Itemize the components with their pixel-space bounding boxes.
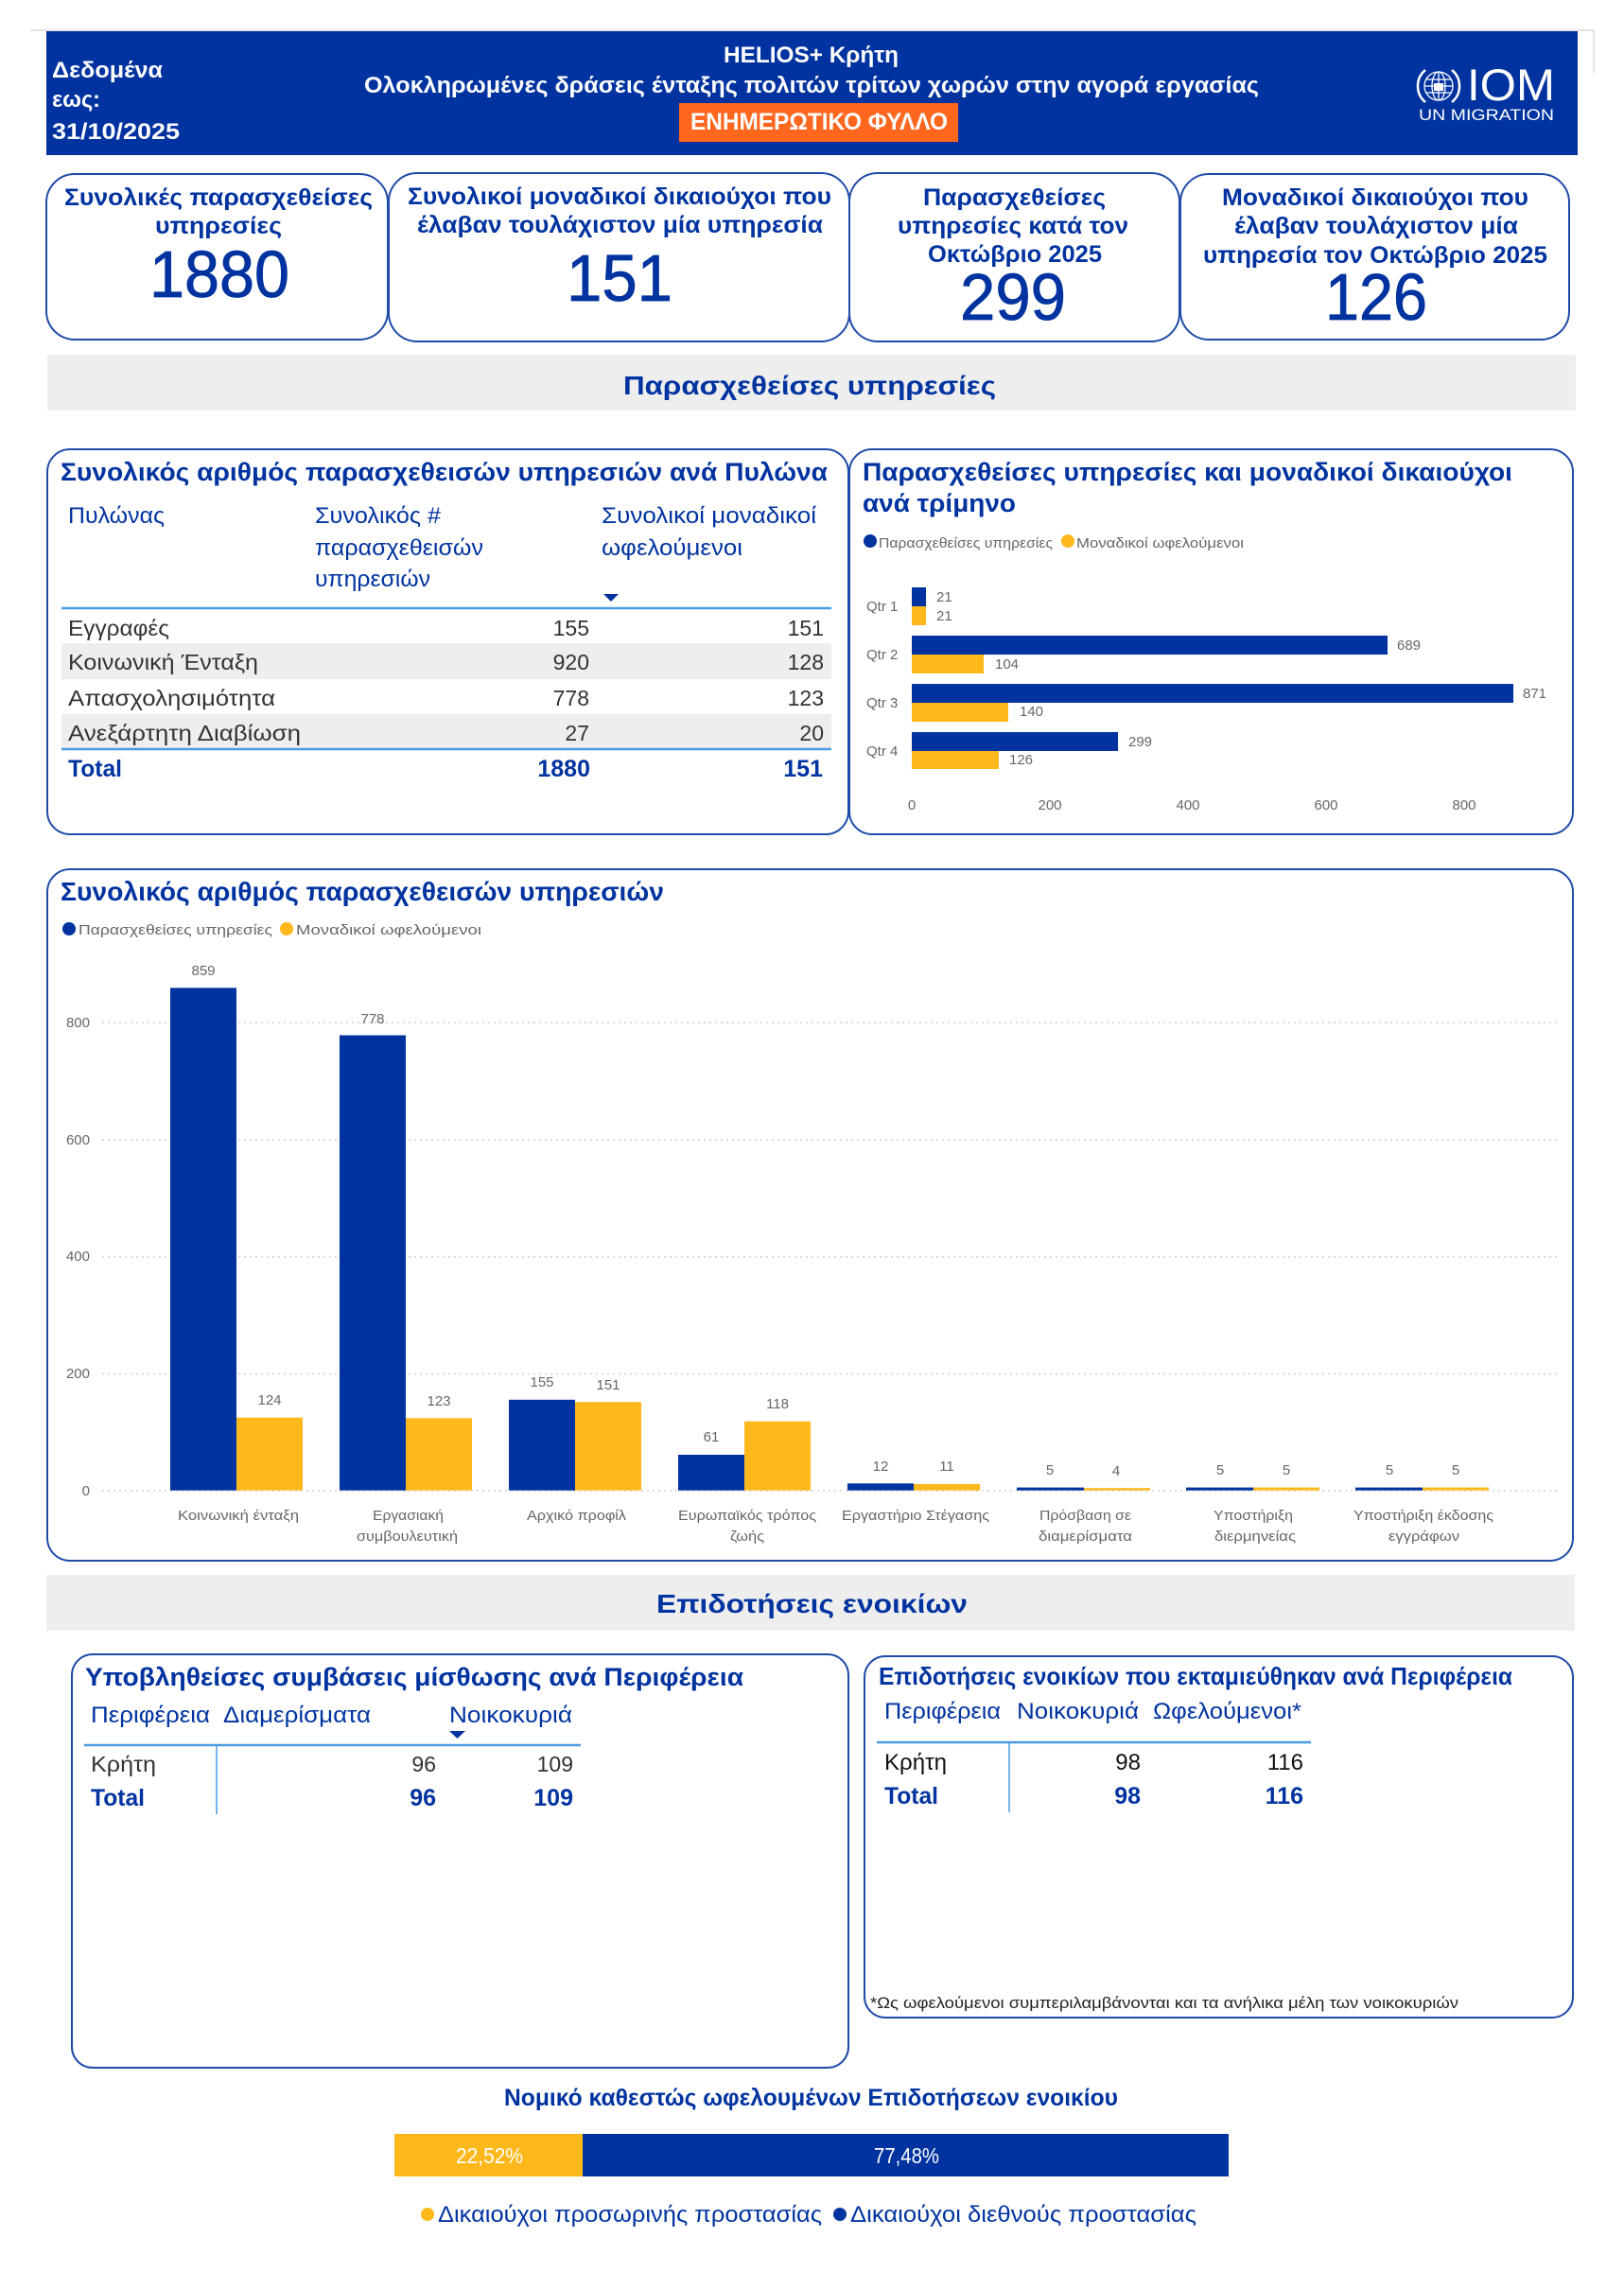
y axis labels: 400 xyxy=(66,1249,90,1265)
table header: Συνολικοί μοναδικοί xyxy=(602,503,817,529)
horizontal bar chart: 140 xyxy=(1020,704,1043,720)
chart legend xyxy=(62,922,481,938)
panel: submitted leases by region xyxy=(72,1654,848,2068)
KPI card: beneficiaries in October xyxy=(1180,174,1569,340)
KPI card: total services xyxy=(46,174,388,340)
table rows: 920 xyxy=(553,650,589,674)
y axis labels: 0 xyxy=(82,1483,90,1499)
horizontal bar chart: 689 xyxy=(1397,638,1421,654)
horizontal bar chart: 21 xyxy=(936,608,952,624)
chart legend: Παρασχεθείσες υπηρεσίες xyxy=(79,922,272,938)
horizontal bar chart: Qtr 2 xyxy=(866,647,898,663)
horizontal bar chart: 400 xyxy=(1176,797,1200,813)
icon: IOM logo xyxy=(1418,60,1555,124)
table rows: Total xyxy=(884,1783,938,1809)
table header: ωφελούμενοι xyxy=(602,535,742,561)
KPI card: services in October: Παρασχεθείσες xyxy=(923,184,1106,211)
table rows xyxy=(68,616,824,745)
footnote: *Ως ωφελούμενοι συμπεριλαμβάνονται και τα ανήλικα μέλη των νοικοκυριών xyxy=(870,1994,1458,2012)
table rows: 109 xyxy=(533,1785,573,1811)
table rows: 96 xyxy=(411,1752,436,1776)
table rows: 27 xyxy=(565,721,589,745)
x axis labels: Υποστήριξη έκδοσης xyxy=(1353,1508,1493,1524)
x axis labels: Αρχικό προφίλ xyxy=(527,1508,627,1524)
table rows: Ανεξάρτητη Διαβίωση xyxy=(68,721,301,745)
KPI card: beneficiaries in October: 126 xyxy=(1325,260,1427,334)
table rows: Κρήτη xyxy=(91,1752,156,1776)
chart title xyxy=(863,458,1512,517)
factsheet badge xyxy=(679,103,958,142)
y axis labels xyxy=(66,1015,90,1499)
KPI card: total beneficiaries: έλαβαν τουλάχιστον μία υπηρεσία xyxy=(417,212,824,238)
header banner xyxy=(46,31,1578,155)
legal status legend xyxy=(421,2202,1196,2228)
KPI card: services in October: 299 xyxy=(960,260,1066,334)
title: HELIOS+ Κρήτη xyxy=(724,43,899,68)
KPI card: total beneficiaries: 151 xyxy=(567,241,672,315)
horizontal bar chart: 104 xyxy=(995,656,1019,673)
section heading: services: Παρασχεθείσες υπηρεσίες xyxy=(623,371,996,400)
table header xyxy=(68,503,817,602)
table rows: 96 xyxy=(410,1785,436,1811)
table header: Περιφέρεια xyxy=(884,1699,1001,1724)
KPI card: services in October: υπηρεσίες κατά τον xyxy=(898,213,1128,239)
KPI card: beneficiaries in October: έλαβαν τουλάχιστον μία xyxy=(1234,213,1519,239)
panel: services by pillar table xyxy=(47,449,848,834)
table rows: Total xyxy=(91,1785,145,1811)
chart legend xyxy=(864,534,1244,551)
table title: Συνολικός αριθμός παρασχεθεισών υπηρεσιών ανά Πυλώνα xyxy=(61,458,828,486)
chart title: ανά τρίμηνο xyxy=(863,489,1016,517)
stacked bar: legal status xyxy=(394,2134,1229,2176)
chart legend: Μοναδικοί ωφελούμενοι xyxy=(1076,535,1244,551)
table title: Υποβληθείσες συμβάσεις μίσθωσης ανά Περιφέρεια xyxy=(85,1663,743,1691)
horizontal bar chart xyxy=(866,587,1546,813)
column chart: 859 xyxy=(191,963,216,979)
panel: subsidies disbursed by region xyxy=(864,1656,1573,2018)
column chart: 11 xyxy=(939,1459,954,1475)
section heading: rent subsidies: Επιδοτήσεις ενοικίων xyxy=(656,1589,968,1618)
section heading: rent subsidies xyxy=(46,1575,1575,1631)
table rows: 123 xyxy=(788,686,824,710)
legal status heading: Νομικό καθεστώς ωφελουμένων Επιδοτήσεων ενοικίου xyxy=(504,2085,1118,2111)
table total: 1880 xyxy=(537,756,590,782)
table title: Επιδοτήσεις ενοικίων που εκταμιεύθηκαν ανά Περιφέρεια xyxy=(879,1662,1512,1690)
table rows xyxy=(884,1750,1303,1809)
data date: Δεδομένα xyxy=(52,58,163,83)
column chart: 151 xyxy=(596,1377,620,1393)
table rows: Κρήτη xyxy=(884,1750,947,1775)
table header: Πυλώνας xyxy=(68,503,165,529)
chart legend: Μοναδικοί ωφελούμενοι xyxy=(296,922,481,938)
table header: υπηρεσιών xyxy=(315,567,430,592)
horizontal bar chart: 21 xyxy=(936,589,952,605)
horizontal bar chart: 871 xyxy=(1523,686,1546,702)
table rows: 20 xyxy=(799,721,824,745)
table rows: 778 xyxy=(553,686,589,710)
table rows: 116 xyxy=(1266,1783,1303,1809)
icon: IOM logo: UN MIGRATION xyxy=(1419,106,1554,124)
KPI card: total services: υπηρεσίες xyxy=(155,213,282,239)
chart title: Συνολικός αριθμός παρασχεθεισών υπηρεσιών xyxy=(61,877,664,906)
table header xyxy=(884,1699,1301,1724)
column chart: 12 xyxy=(873,1459,888,1475)
table header: Ωφελούμενοι* xyxy=(1153,1699,1301,1724)
data date: εως: xyxy=(52,87,100,113)
table header: παρασχεθεισών xyxy=(315,535,483,561)
table header: Νοικοκυριά xyxy=(449,1703,572,1728)
legal status legend: Δικαιούχοι διεθνούς προστασίας xyxy=(850,2202,1196,2228)
table rows: Κοινωνική Ένταξη xyxy=(68,650,258,674)
KPI card: total beneficiaries xyxy=(389,173,849,341)
x axis labels: συμβουλευτική xyxy=(357,1529,458,1545)
column chart: 118 xyxy=(766,1396,789,1412)
y axis labels: 200 xyxy=(66,1366,90,1382)
horizontal bar chart: Qtr 4 xyxy=(866,743,898,760)
x axis labels xyxy=(178,1508,1493,1545)
section heading: services xyxy=(47,355,1576,411)
column chart: 5 xyxy=(1046,1462,1054,1478)
x axis labels: Εργασιακή xyxy=(373,1508,444,1524)
KPI card: services in October: Οκτώβριο 2025 xyxy=(928,241,1102,268)
KPI card: beneficiaries in October: Μοναδικοί δικαιούχοι που xyxy=(1222,184,1528,211)
table header: Περιφέρεια xyxy=(91,1703,210,1728)
table rows: 98 xyxy=(1115,1750,1141,1775)
stacked bar: legal status: 22,52% xyxy=(456,2143,523,2168)
table header: Νοικοκυριά xyxy=(1017,1699,1139,1724)
column chart: 5 xyxy=(1216,1462,1224,1478)
horizontal bar chart: 0 xyxy=(908,797,916,813)
y axis labels: 600 xyxy=(66,1132,90,1148)
panel: services per quarter xyxy=(849,449,1573,834)
table total: 151 xyxy=(783,756,823,782)
table rows: 151 xyxy=(788,616,824,640)
x axis labels: Πρόσβαση σε xyxy=(1039,1508,1131,1524)
table total: Total xyxy=(68,756,122,782)
table rows: 109 xyxy=(537,1752,573,1776)
x axis labels: εγγράφων xyxy=(1388,1529,1459,1545)
x axis labels: Κοινωνική ένταξη xyxy=(178,1508,299,1524)
stacked bar: legal status: 77,48% xyxy=(874,2143,939,2168)
table rows: 128 xyxy=(788,650,824,674)
horizontal bar chart: 200 xyxy=(1038,797,1062,813)
icon: IOM logo: IOM xyxy=(1467,60,1555,110)
table rows: 116 xyxy=(1267,1750,1303,1775)
x axis labels: ζωής xyxy=(730,1529,764,1545)
title: Ολοκληρωμένες δράσεις ένταξης πολιτών τρίτων χωρών στην αγορά εργασίας xyxy=(364,73,1259,98)
legal status legend: Δικαιούχοι προσωρινής προστασίας xyxy=(438,2202,822,2228)
x axis labels: διαμερίσματα xyxy=(1039,1529,1132,1545)
factsheet badge: ΕΝΗΜΕΡΩΤΙΚΟ ΦΥΛΛΟ xyxy=(690,109,948,135)
data date xyxy=(52,58,180,145)
chart title: Παρασχεθείσες υπηρεσίες και μοναδικοί δικαιούχοι xyxy=(863,458,1512,486)
title xyxy=(364,43,1259,98)
KPI card: total beneficiaries: Συνολικοί μοναδικοί δικαιούχοι που xyxy=(408,184,831,210)
horizontal bar chart: 126 xyxy=(1009,752,1033,768)
column chart: 4 xyxy=(1112,1463,1120,1479)
KPI card: total services: 1880 xyxy=(149,237,289,311)
table rows: Απασχολησιμότητα xyxy=(68,686,275,710)
table rows: Εγγραφές xyxy=(68,616,169,640)
KPI card: total services: Συνολικές παρασχεθείσες xyxy=(64,184,373,211)
y axis labels: 800 xyxy=(66,1015,90,1031)
x axis labels: Ευρωπαϊκός τρόπος xyxy=(678,1508,816,1524)
column chart: 5 xyxy=(1283,1462,1290,1478)
column chart: 123 xyxy=(427,1393,451,1409)
column chart xyxy=(170,963,1489,1491)
data date: 31/10/2025 xyxy=(52,119,180,145)
x axis labels: Εργαστήριο Στέγασης xyxy=(842,1508,989,1524)
column chart: 155 xyxy=(530,1374,554,1390)
chart legend: Παρασχεθείσες υπηρεσίες xyxy=(879,535,1053,551)
horizontal bar chart: 600 xyxy=(1314,797,1338,813)
column chart: 778 xyxy=(360,1011,385,1027)
table header xyxy=(91,1703,572,1739)
table rows: 155 xyxy=(553,616,589,640)
horizontal bar chart: 800 xyxy=(1452,797,1476,813)
horizontal bar chart: Qtr 1 xyxy=(866,599,898,615)
x axis labels: Υποστήριξη xyxy=(1214,1508,1293,1524)
x axis labels: διερμηνείας xyxy=(1214,1529,1296,1545)
column chart: 5 xyxy=(1452,1462,1459,1478)
column chart: 61 xyxy=(704,1429,719,1445)
table header: Διαμερίσματα xyxy=(223,1703,371,1728)
table rows: 98 xyxy=(1114,1783,1141,1809)
panel: services by type xyxy=(47,869,1573,1561)
column chart: 5 xyxy=(1386,1462,1393,1478)
KPI card: services in October xyxy=(849,173,1179,341)
table rows xyxy=(91,1752,573,1811)
horizontal bar chart: Qtr 3 xyxy=(866,695,898,711)
table header: Συνολικός # xyxy=(315,503,442,529)
KPI card: beneficiaries in October: υπηρεσία τον Οκτώβριο 2025 xyxy=(1203,242,1547,269)
horizontal bar chart: 299 xyxy=(1128,734,1152,750)
table total xyxy=(68,756,823,782)
column chart: 124 xyxy=(257,1392,282,1408)
